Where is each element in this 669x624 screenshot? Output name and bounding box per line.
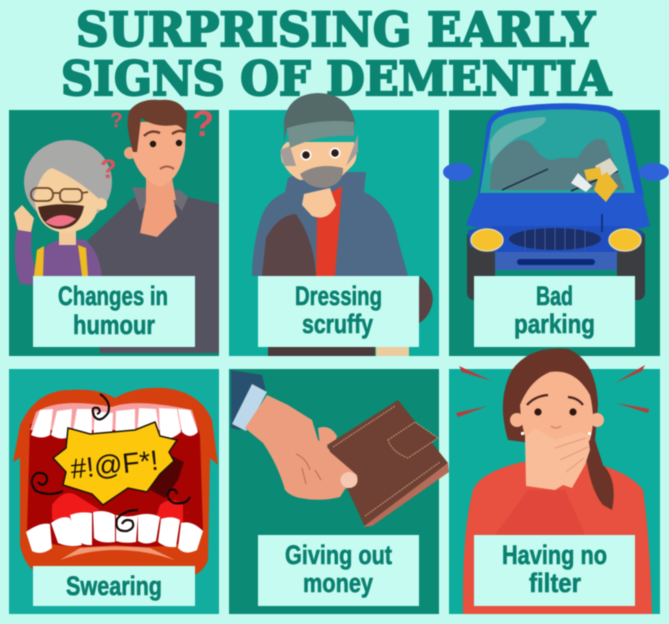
illustration: shouting mouth [13, 388, 218, 576]
label: having no filter [474, 535, 635, 606]
label: swearing [33, 566, 195, 606]
icon: question marks: ? [192, 103, 214, 144]
illustration: blue car [443, 103, 669, 300]
icon: question marks [100, 103, 214, 184]
icon: question marks: ? [100, 154, 116, 184]
panel: changes in humour [9, 100, 219, 356]
panel: bad parking [443, 103, 669, 356]
icon: lower teeth [26, 511, 203, 553]
label: changes in humour: Changes in [58, 281, 168, 311]
icon: question marks: ? [110, 109, 123, 132]
title [61, 3, 611, 107]
label: giving out money: money [303, 568, 373, 598]
label: having no filter: filter [529, 568, 581, 598]
label: dressing scruffy [258, 276, 419, 347]
label: giving out money: Giving out [285, 540, 392, 570]
label: bad parking: parking [514, 309, 595, 339]
illustration: hand with wallet [231, 370, 449, 527]
label: changes in humour [33, 276, 195, 347]
illustration: scruffy man [252, 93, 433, 356]
icon: upper teeth [31, 408, 198, 442]
label: bad parking: Bad [536, 281, 573, 311]
icon: expletive burst: #!@F*! [69, 445, 160, 485]
label: bad parking [474, 276, 635, 347]
illustration: woman covering mouth [456, 348, 652, 614]
label: swearing: Swearing [66, 571, 162, 601]
title: SURPRISING EARLY [76, 3, 595, 58]
illustration: laughing woman [14, 140, 112, 285]
icon: surprise lines [456, 365, 649, 417]
panel: swearing [9, 369, 219, 614]
label: changes in humour: humour [73, 310, 155, 340]
label: dressing scruffy: scruffy [302, 309, 373, 339]
panel: giving out money [229, 369, 449, 614]
label: dressing scruffy: Dressing [295, 281, 382, 311]
illustration: thinking man [88, 100, 219, 353]
panel: dressing scruffy [229, 93, 439, 356]
panel: having no filter [449, 348, 660, 614]
icon: swirls [32, 394, 190, 531]
title: SIGNS OF DEMENTIA [61, 52, 611, 107]
label: giving out money [258, 535, 419, 606]
icon: expletive burst [53, 422, 177, 505]
label: having no filter: Having no [502, 540, 607, 570]
icon: parking tickets [571, 158, 618, 202]
